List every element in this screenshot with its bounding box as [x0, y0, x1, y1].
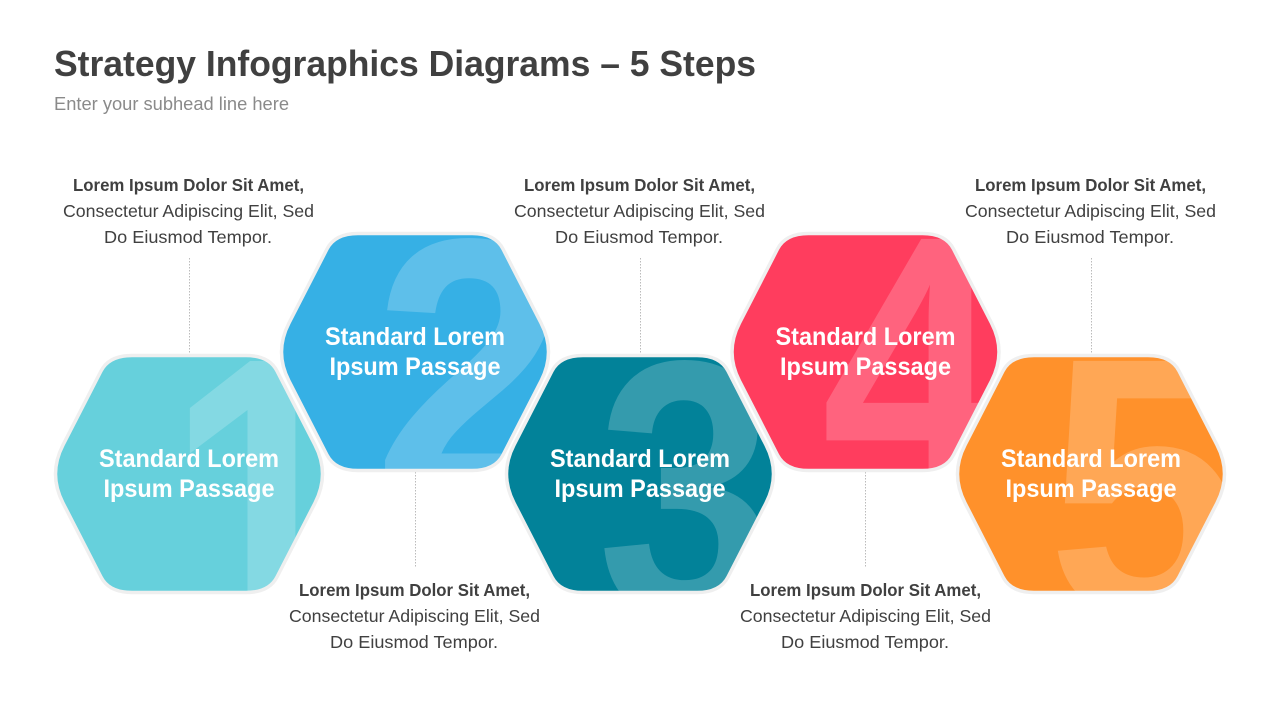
text block: step 5 description: Lorem Ipsum Dolor Sit Amet,: [975, 175, 1206, 195]
panel: hexagon step 4: Ipsum Passage: [780, 353, 951, 381]
text block: step 1 description: [63, 175, 314, 247]
text block: step 4 description: Consectetur Adipiscing Elit, Sed: [740, 606, 991, 626]
text block: step 3 description: Lorem Ipsum Dolor Sit Amet,: [524, 175, 755, 195]
panel: hexagon step 3: Ipsum Passage: [554, 475, 726, 503]
panel: hexagon step 4: [730, 232, 1000, 472]
panel: hexagon step 1: Ipsum Passage: [104, 475, 275, 503]
panel: hexagon step 1: [54, 354, 324, 594]
text block: step 5 description: Consectetur Adipiscing Elit, Sed: [965, 201, 1216, 221]
text block: step 1 description: Do Eiusmod Tempor.: [104, 227, 272, 247]
text block: step 3 description: Do Eiusmod Tempor.: [555, 227, 723, 247]
text block: step 2 description: Consectetur Adipiscing Elit, Sed: [289, 606, 540, 626]
connector line: step 5: [1090, 258, 1092, 354]
connector line: step 3: [640, 258, 642, 354]
connector line: step 2: [414, 472, 416, 568]
text block: step 4 description: Lorem Ipsum Dolor Sit Amet,: [750, 580, 981, 600]
panel: hexagon step 2: 2: [373, 162, 567, 573]
text block: step 4 description: [740, 580, 991, 652]
panel: hexagon step 5: [956, 354, 1226, 594]
panel: hexagon step 2: [280, 232, 550, 472]
text block: step 1 description: Consectetur Adipiscing Elit, Sed: [63, 201, 314, 221]
text block: step 4 description: Do Eiusmod Tempor.: [781, 632, 949, 652]
text block: step 5 description: Do Eiusmod Tempor.: [1006, 227, 1174, 247]
connector line: step 1: [188, 258, 190, 354]
panel: hexagon step 5: Standard Lorem: [1001, 445, 1181, 473]
text block: step 5 description: [965, 175, 1216, 247]
text block: step 3 description: [514, 175, 765, 247]
panel: hexagon step 4: Standard Lorem: [776, 323, 956, 351]
panel: hexagon step 2: Standard Lorem: [325, 323, 505, 351]
panel: hexagon step 2: Ipsum Passage: [330, 353, 501, 381]
panel: hexagon step 5: Ipsum Passage: [1006, 475, 1177, 503]
text block: step 2 description: Do Eiusmod Tempor.: [330, 632, 498, 652]
panel: hexagon step 4: 4: [822, 159, 1005, 570]
panel: hexagon step 3: [505, 354, 775, 594]
subhead: Enter your subhead line here: [54, 94, 289, 114]
panel: hexagon step 3: 3: [597, 285, 775, 696]
panel: hexagon step 1: Standard Lorem: [99, 445, 279, 473]
text block: step 3 description: Consectetur Adipiscing Elit, Sed: [514, 201, 765, 221]
title: Strategy Infographics Diagrams – 5 Steps: [54, 43, 756, 84]
panel: hexagon step 5: 5: [1047, 282, 1243, 693]
panel: hexagon step 3: Standard Lorem: [550, 445, 730, 473]
text block: step 2 description: [289, 580, 540, 652]
connector line: step 4: [864, 472, 866, 568]
text block: step 2 description: Lorem Ipsum Dolor Sit Amet,: [299, 580, 530, 600]
text block: step 1 description: Lorem Ipsum Dolor Sit Amet,: [73, 175, 304, 195]
